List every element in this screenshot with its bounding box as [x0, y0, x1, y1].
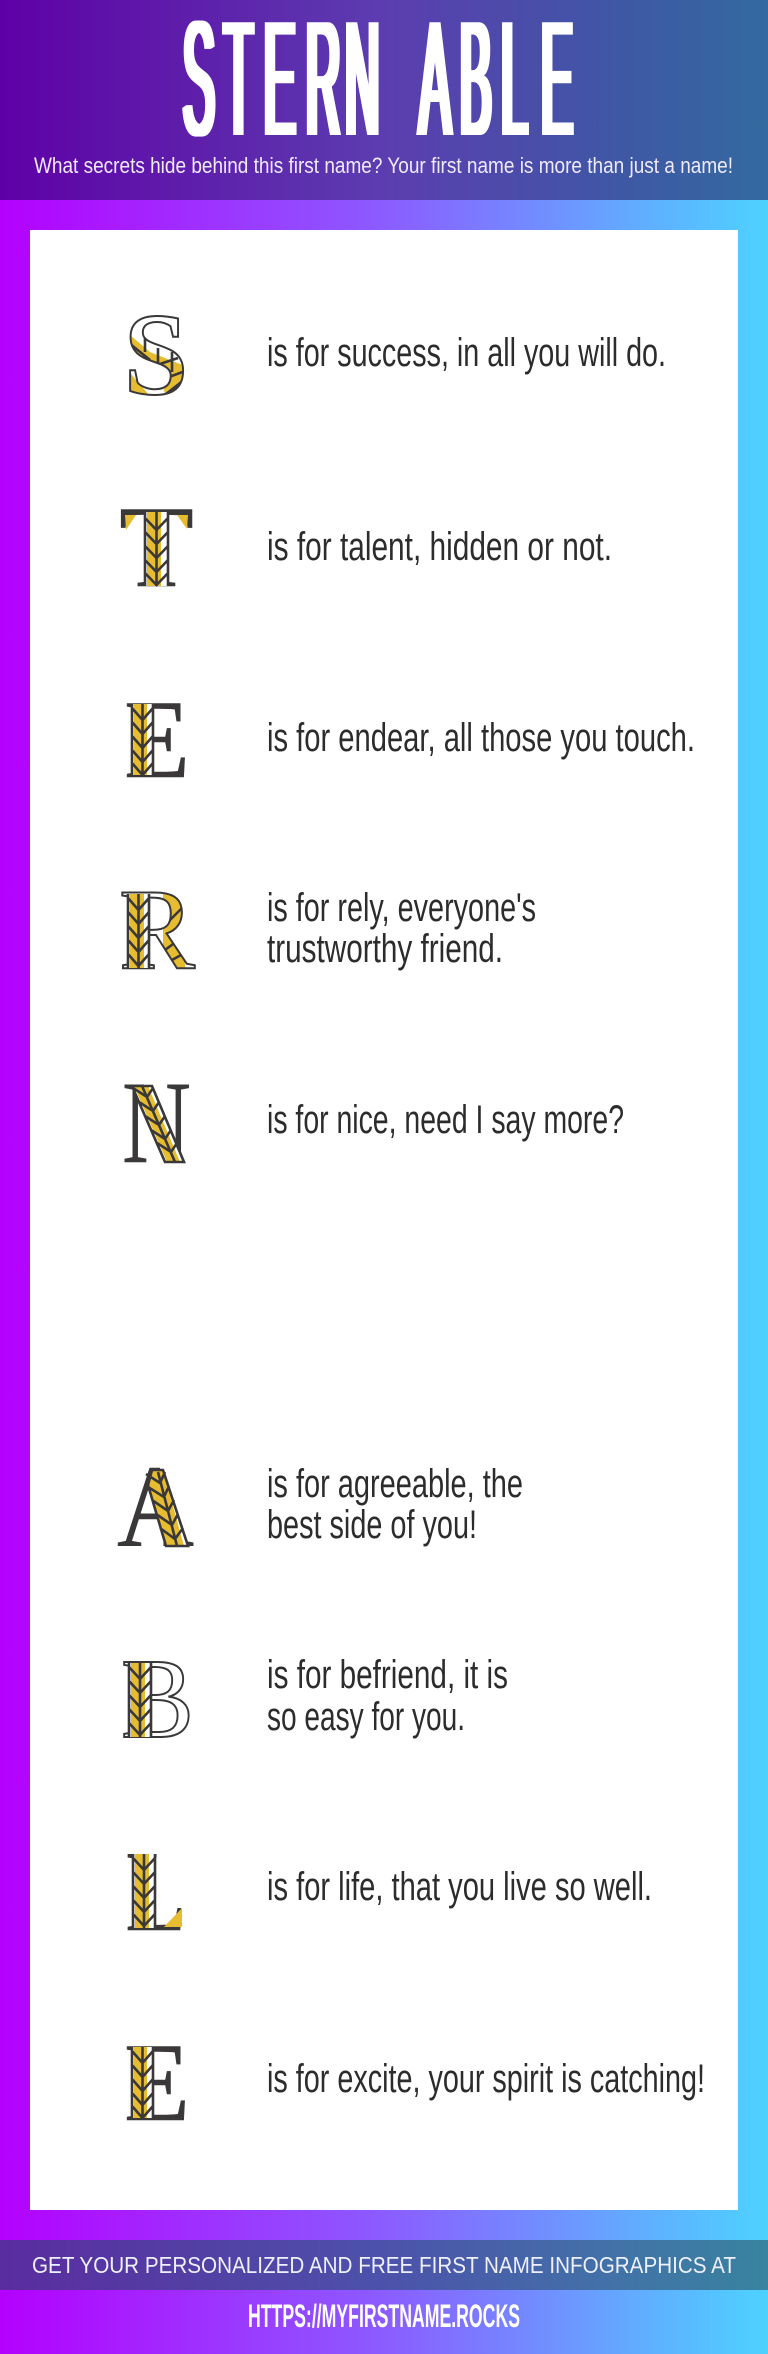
row: R: [121, 892, 535, 970]
icon: letter B: B: [121, 1635, 194, 1762]
footer band: [0, 2240, 768, 2290]
text: A: best side of you!: [267, 1503, 477, 1547]
row: E: [124, 678, 695, 802]
row: A: [117, 1441, 523, 1572]
icon: letter L: L: [125, 1828, 187, 1956]
icon: letter T: T: [119, 483, 194, 612]
row: B: [121, 1635, 508, 1762]
row: T: [119, 483, 612, 612]
white panel: [30, 230, 738, 2210]
row: L: [125, 1828, 652, 1956]
icon: letter R: R: [119, 866, 195, 993]
text: B: [267, 1653, 508, 1739]
text: R: is for rely, everyone's: [267, 886, 536, 930]
text: R: [267, 886, 536, 971]
icon: letter S: [129, 315, 184, 396]
footer url: HTTPS://MYFIRSTNAME.ROCKS: [248, 2298, 520, 2334]
icon: letter S: S: [124, 289, 188, 420]
text: N: is for nice, need I say more?: [267, 1098, 624, 1142]
icon: letter E: E: [124, 678, 190, 802]
text: A: is for agreeable, the: [267, 1462, 523, 1506]
text: A: [267, 1462, 523, 1547]
row: S: [129, 315, 664, 396]
icon: letter R: [121, 892, 196, 970]
text: B: is for befriend, it is: [267, 1653, 508, 1697]
icon: letter A: A: [117, 1441, 194, 1572]
row: N: [122, 1057, 624, 1188]
icon: letter N: N: [122, 1057, 191, 1188]
header band: [0, 0, 768, 200]
icon: letter E: E: [124, 2021, 190, 2145]
text: B: so easy for you.: [267, 1695, 465, 1739]
text: T: is for talent, hidden or not.: [267, 525, 612, 569]
row: E (second): [124, 2021, 705, 2145]
text: R: trustworthy friend.: [267, 927, 503, 971]
